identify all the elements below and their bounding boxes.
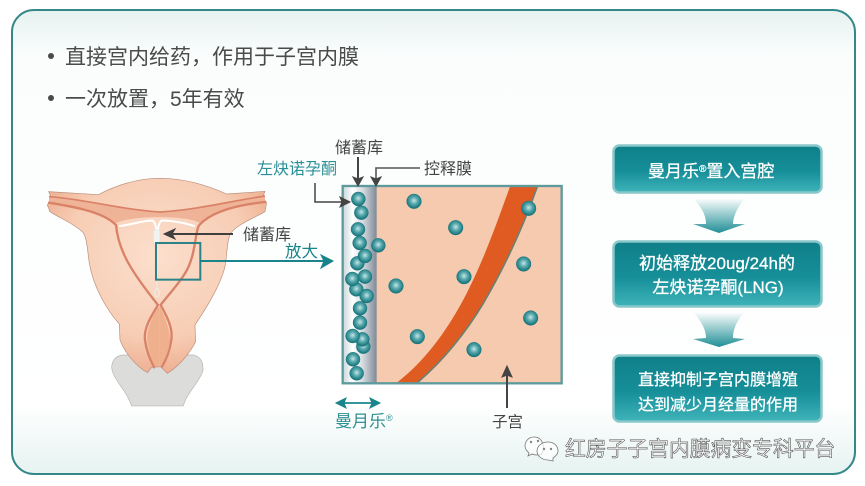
watermark: 红房子子宫内膜病变专科平台 [565,438,835,461]
label: reservoir with arrow: 储蓄库 [243,226,291,244]
cervix base [112,355,203,406]
flow box 3 [614,356,822,422]
label: Mirena span: 曼月乐 [335,412,386,431]
flow box 3: 直接抑制子宫内膜增殖 [638,371,798,389]
enlarged view [343,186,562,383]
label: uterus [492,366,523,431]
label: uterus: 子宫 [492,413,523,431]
flow arrow 2 [693,312,745,347]
flow box 2 [614,242,822,306]
label: levonorgestrel [257,160,350,207]
tissue background [343,186,562,383]
canal line [158,307,160,367]
label: magnify with arrow: 放大 [285,242,318,261]
label: membrane [371,160,472,186]
flow arrow 1 [693,198,745,233]
flow box 2: 左炔诺孕酮(LNG) [652,278,784,297]
flow box 1: 置入宫腔 [706,162,774,181]
band edge [417,187,537,383]
fallopian band [49,196,265,223]
bullet list [48,46,359,111]
label: reservoir with arrow [164,226,291,244]
cervical canal [147,307,170,367]
cavity outline [49,202,265,367]
flow box 3: 达到减少月经量的作用 [638,396,798,414]
endometrium band [396,187,537,383]
flow box 1 [614,146,822,192]
bullet: five years: 一次放置，5年有效 [65,88,245,111]
magnify square [156,243,200,280]
reservoir band [343,186,377,383]
fallopian upper line [49,196,265,212]
flow box 1: 曼月乐 [648,162,699,181]
flow box 1: ® [699,164,707,175]
flow box 2: 初始释放20ug/24h的 [639,254,795,273]
label: reservoir top: 储蓄库 [335,139,383,157]
icon: chat bubbles [525,437,558,461]
label: reservoir top [335,139,383,186]
label: membrane: 控释膜 [424,160,472,178]
label: Mirena span [335,398,393,431]
uterus body [47,178,267,373]
label: magnify with arrow [200,242,333,268]
bullet: direct delivery: 直接宫内给药，作用于子宫内膜 [65,46,359,69]
IUD device [120,221,194,297]
uterus illustration [47,178,267,406]
molecules [345,192,538,380]
label: levonorgestrel: 左炔诺孕酮 [257,160,337,178]
label: Mirena span: ® [386,413,393,423]
view border [343,186,562,383]
